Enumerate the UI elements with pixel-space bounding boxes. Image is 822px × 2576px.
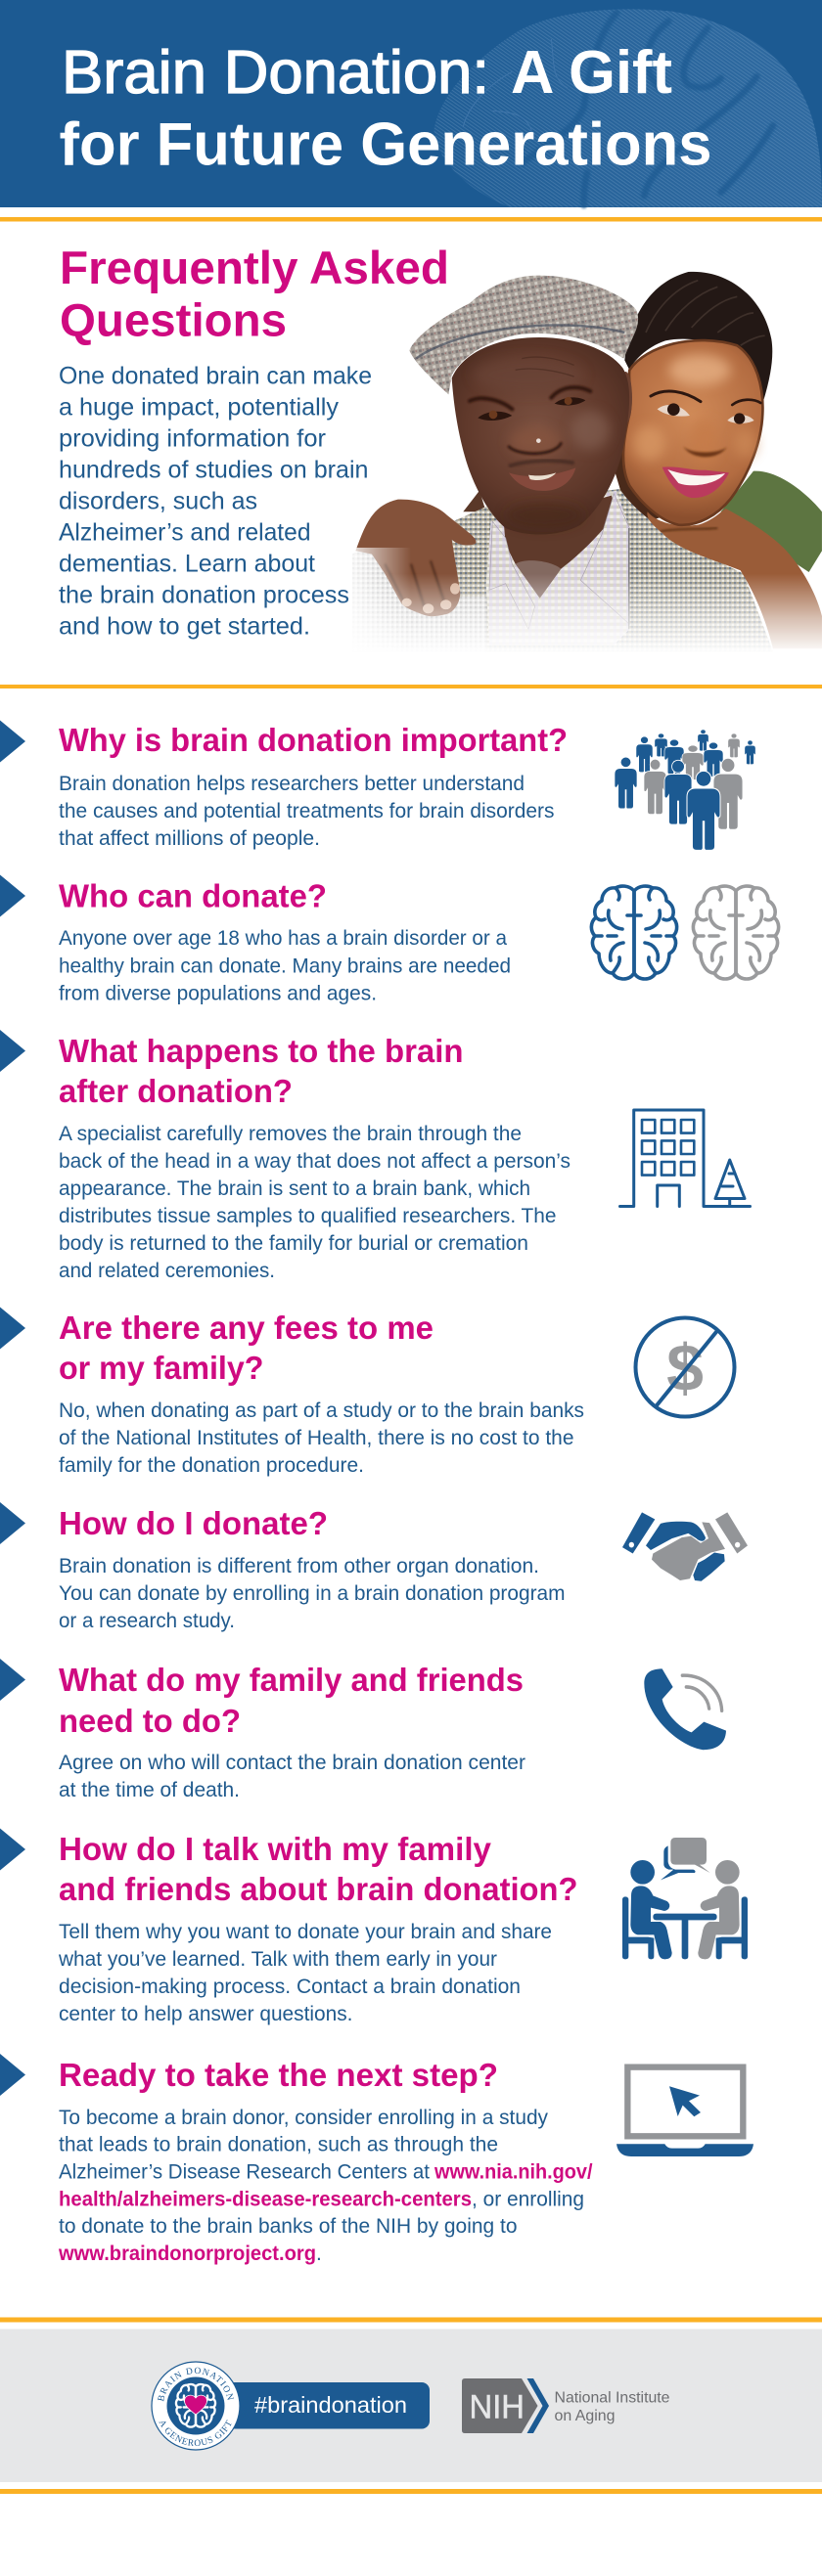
answer: of the National Institutes of Health, there is no cost to the <box>59 1427 573 1449</box>
answer: A specialist carefully removes the brain through the <box>59 1123 522 1145</box>
hashtag pill <box>196 2382 430 2429</box>
heading: How do I donate? <box>59 1505 328 1541</box>
man brows and eyes <box>470 387 590 409</box>
arrow <box>0 2054 25 2096</box>
answer: Brain donation is different from other organ donation. <box>59 1555 539 1577</box>
answer: decision-making process. Contact a brain donation <box>59 1976 521 1998</box>
answer <box>58 2107 593 2265</box>
photo of older man and younger woman <box>345 272 822 653</box>
arrow <box>0 1502 25 1544</box>
intro text: the brain donation process <box>59 583 349 608</box>
intro text: dementias. Learn about <box>59 552 315 577</box>
icon: handshake <box>622 1512 748 1581</box>
answer: what you’ve learned. Talk with them early in your <box>58 1948 497 1971</box>
intro text: providing information for <box>59 426 326 452</box>
answer: healthy brain can donate. Many brains are needed <box>59 955 511 978</box>
heading: and friends about brain donation? <box>59 1871 577 1907</box>
header banner <box>0 0 822 207</box>
answer: , or enrolling <box>472 2189 584 2210</box>
answer: To become a brain donor, consider enrolling in a study <box>59 2107 549 2129</box>
answer: and related ceremonies. <box>59 1260 275 1282</box>
title: Brain Donation: <box>62 39 489 107</box>
answer: body is returned to the family for burial or cremation <box>59 1232 528 1255</box>
answer: Alzheimer’s Disease Research Centers at <box>59 2161 430 2183</box>
answer: Brain donation helps researchers better understand <box>59 773 525 795</box>
woman face <box>623 340 762 525</box>
answer: back of the head in a way that does not affect a person’s <box>59 1150 571 1173</box>
answer: at the time of death. <box>59 1779 240 1801</box>
faq 5 <box>0 1502 748 1632</box>
heading: Who can donate? <box>59 878 327 913</box>
answer <box>59 1555 566 1632</box>
man nose and mouth <box>509 443 561 454</box>
man face <box>619 372 632 423</box>
hand on shoulder <box>355 500 476 616</box>
man neck <box>504 496 616 599</box>
heading: What do my family and friends <box>59 1662 524 1698</box>
faq 6 <box>0 1659 726 1801</box>
intro text: Alzheimer’s and related <box>59 520 311 546</box>
heading: What happens to the brain <box>59 1033 464 1069</box>
icon: two people talking at a table <box>622 1838 748 1959</box>
answer: appearance. The brain is sent to a brain bank, which <box>59 1177 530 1200</box>
answer: or a research study. <box>59 1610 235 1632</box>
answer: that affect millions of people. <box>59 827 320 850</box>
heading <box>59 1831 577 1907</box>
intro text <box>59 364 372 640</box>
arrow <box>0 1307 25 1350</box>
answer: www.braindonorproject.org <box>58 2243 316 2265</box>
heading: How do I talk with my family <box>59 1831 492 1867</box>
heading: or my family? <box>59 1350 264 1386</box>
hashtag pill: #braindonation <box>254 2392 407 2418</box>
answer: You can donate by enrolling in a brain donation program <box>59 1582 566 1605</box>
answer <box>59 1752 525 1801</box>
answer <box>59 1123 571 1282</box>
intro text: disorders, such as <box>59 489 257 514</box>
intro heading <box>60 242 449 346</box>
heading <box>59 1310 434 1386</box>
icon: phone <box>644 1668 726 1750</box>
answer <box>59 1399 584 1477</box>
heading: after donation? <box>59 1073 293 1109</box>
answer: from diverse populations and ages. <box>59 982 377 1005</box>
brain donation seal: A GENEROUS GIFT <box>159 2420 232 2446</box>
title: for Future Generations <box>59 111 712 178</box>
woman neck shadow <box>614 443 678 521</box>
intro text: hundreds of studies on brain <box>59 458 368 483</box>
intro heading: Questions <box>60 293 287 346</box>
icon: blue brain <box>591 886 677 979</box>
arrow <box>0 1030 25 1072</box>
answer: that leads to brain donation, such as through the <box>59 2134 498 2155</box>
heading: Are there any fees to me <box>59 1310 434 1346</box>
title: A Gift <box>511 39 672 107</box>
NIH logo: on Aging <box>554 2408 615 2424</box>
arrow <box>0 874 25 917</box>
intro panel <box>59 242 822 653</box>
answer: Anyone over age 18 who has a brain disorder or a <box>59 927 507 950</box>
faq 2 <box>0 874 779 1005</box>
NIH logo <box>462 2378 670 2433</box>
heading: need to do? <box>59 1703 241 1739</box>
faq 4 <box>0 1307 734 1477</box>
answer: center to help answer questions. <box>59 2003 352 2025</box>
answer: Tell them why you want to donate your brain and share <box>59 1921 552 1943</box>
icon: building and tree <box>620 1110 750 1207</box>
intro text: a huge impact, potentially <box>59 395 340 421</box>
faq 7 <box>0 1829 748 2025</box>
intro text: One donated brain can make <box>59 364 372 389</box>
NIH logo: National Institute <box>554 2390 670 2406</box>
brain donation seal <box>151 2361 239 2451</box>
icon: no fee: $ <box>666 1331 704 1405</box>
green shirt <box>721 471 822 572</box>
answer: family for the donation procedure. <box>59 1454 364 1477</box>
jacket <box>352 489 773 652</box>
intro text: and how to get started. <box>59 614 310 640</box>
shirt <box>486 491 629 645</box>
answer: health/alzheimers-disease-research-centers <box>59 2189 472 2210</box>
answer: the causes and potential treatments for brain disorders <box>59 800 554 822</box>
arrow <box>0 1659 25 1701</box>
footer panel <box>0 2330 822 2482</box>
brain donation seal: BRAIN DONATION <box>158 2367 234 2402</box>
heading: Ready to take the next step? <box>59 2057 498 2093</box>
answer <box>59 773 554 850</box>
header brain engraving <box>434 9 822 207</box>
heading <box>59 1033 464 1109</box>
NIH logo: NIH <box>470 2388 525 2425</box>
woman arm <box>647 509 822 648</box>
answer <box>59 927 511 1005</box>
icon: no fee <box>636 1318 734 1416</box>
icon: laptop <box>616 2067 754 2156</box>
photo bottom fade <box>345 574 822 653</box>
answer: No, when donating as part of a study or to the brain banks <box>59 1399 584 1422</box>
faq 3 <box>0 1030 750 1282</box>
arrow <box>0 720 25 763</box>
answer: distributes tissue samples to qualified researchers. The <box>59 1205 556 1227</box>
title <box>59 39 712 178</box>
shirt collars <box>580 494 629 624</box>
woman smile <box>662 466 729 498</box>
faq 8 <box>0 2054 754 2265</box>
arrow <box>0 1829 25 1870</box>
answer: www.nia.nih.gov/ <box>434 2161 593 2183</box>
intro heading: Frequently Asked <box>60 242 449 293</box>
woman brows and eyes <box>651 391 701 402</box>
answer: to donate to the brain banks of the NIH by going to <box>59 2215 517 2238</box>
faq 1 <box>0 720 755 850</box>
heading <box>59 1662 524 1739</box>
answer: Agree on who will contact the brain donation center <box>59 1752 525 1774</box>
cap <box>409 276 638 394</box>
answer <box>58 1921 552 2025</box>
icon: grey brain <box>693 886 779 979</box>
icon: crowd <box>615 730 755 850</box>
answer: . <box>316 2243 322 2265</box>
hair <box>624 272 772 399</box>
heading: Why is brain donation important? <box>59 722 568 758</box>
